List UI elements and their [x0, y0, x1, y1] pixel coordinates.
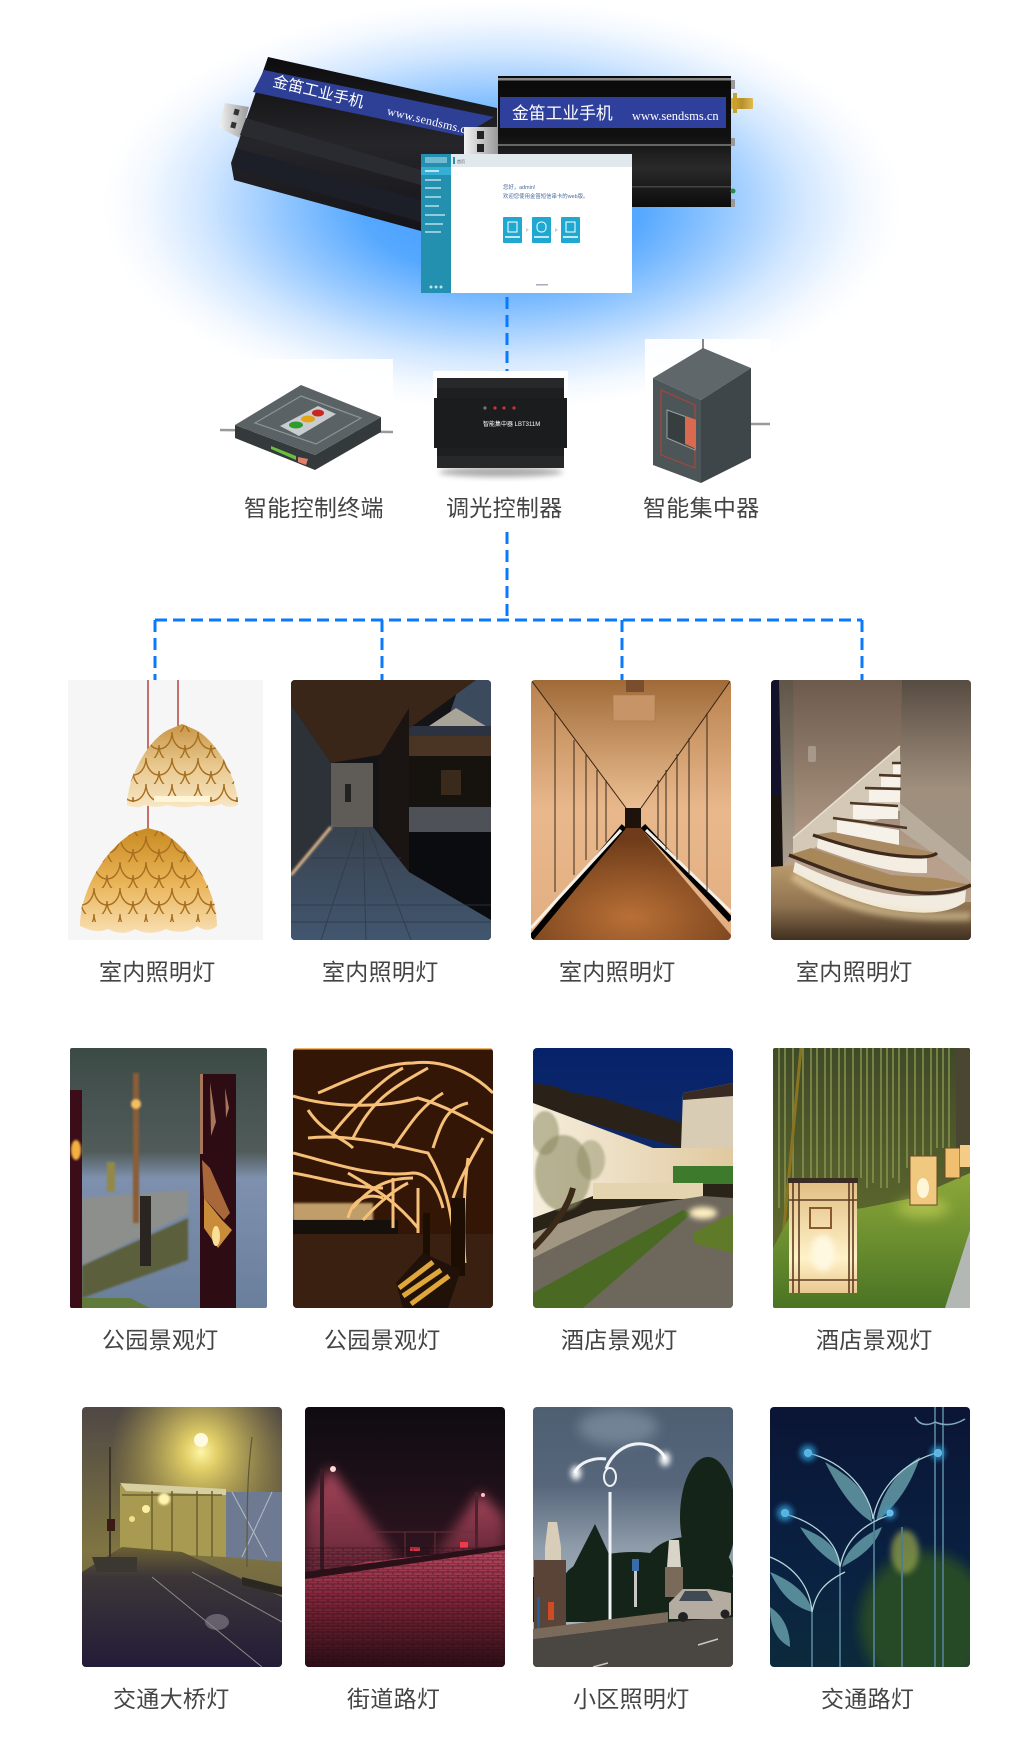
device: smart control terminal	[220, 359, 393, 481]
photo: wooden pendant lamps	[68, 680, 263, 940]
welcome text: 您好，admin!	[503, 183, 536, 191]
photo: bamboo garden lanterns	[773, 1048, 970, 1308]
photo: glowing corridor	[531, 680, 731, 940]
label: hotel light 2: 酒店景观灯	[816, 1327, 932, 1353]
photo: lit staircase	[771, 680, 971, 940]
tilted modem label	[271, 72, 475, 138]
connector: top dashed line	[506, 297, 508, 372]
photo: trees with string lights	[293, 1048, 493, 1308]
antenna connector	[731, 93, 753, 113]
welcome text: 欢迎您使用金笛短信串卡的web版。	[503, 192, 588, 200]
label: indoor light 1: 室内照明灯	[99, 959, 216, 985]
label: terminal: 智能控制终端	[244, 495, 384, 521]
web console screenshot	[421, 154, 632, 293]
connector: dashed tree from dimmer to lights	[155, 532, 862, 680]
tilted modem label: 金笛工业手机	[271, 72, 366, 112]
photo: park pole lights	[70, 1048, 267, 1308]
photo: hotel courtyard wall	[531, 1048, 733, 1308]
label: hotel light 1: 酒店景观灯	[561, 1327, 678, 1353]
photo: butterfly road lamps	[770, 1407, 970, 1667]
large lantern	[788, 1178, 858, 1293]
controller nameplate: 智能集中器 LBT311M	[483, 420, 540, 428]
photo: dark architecture walkway	[291, 680, 491, 940]
small lanterns	[910, 1145, 970, 1205]
label: park light 2: 公园景观灯	[324, 1327, 440, 1353]
device: smart concentrator	[645, 339, 771, 483]
label: indoor light 2: 室内照明灯	[322, 959, 438, 985]
flow step tiles	[503, 217, 580, 243]
upright modem label: 金笛工业手机	[512, 104, 613, 123]
label: street light: 街道路灯	[347, 1686, 440, 1712]
stair risers	[837, 764, 901, 848]
indicator LEDs	[483, 406, 516, 410]
photo: red street lights	[305, 1407, 505, 1667]
upright modem label	[512, 104, 719, 123]
upright modem label: www.sendsms.cn	[632, 109, 719, 123]
web console screenshot: 首页	[457, 158, 465, 164]
parked car	[669, 1589, 731, 1622]
device: dimming controller	[433, 371, 568, 479]
sidebar menu lines	[425, 157, 447, 288]
upright USB modem	[464, 76, 753, 207]
label: concentrator: 智能集中器	[643, 495, 760, 521]
photo: foggy bridge lights	[82, 1407, 282, 1667]
tilted USB modem	[219, 57, 497, 231]
photo: community lamp	[533, 1407, 736, 1667]
tilted modem label: www.sendsms.cn	[386, 104, 474, 138]
label: park light 1: 公园景观灯	[102, 1327, 218, 1353]
label: road light: 交通路灯	[821, 1686, 914, 1712]
label: bridge light: 交通大桥灯	[113, 1686, 230, 1712]
tree line	[533, 1457, 736, 1622]
blue background glow	[102, 0, 902, 410]
label: indoor light 3: 室内照明灯	[559, 959, 676, 985]
label: dimmer: 调光控制器	[446, 495, 562, 521]
label: indoor light 4: 室内照明灯	[796, 959, 912, 985]
label: community light: 小区照明灯	[573, 1686, 690, 1712]
